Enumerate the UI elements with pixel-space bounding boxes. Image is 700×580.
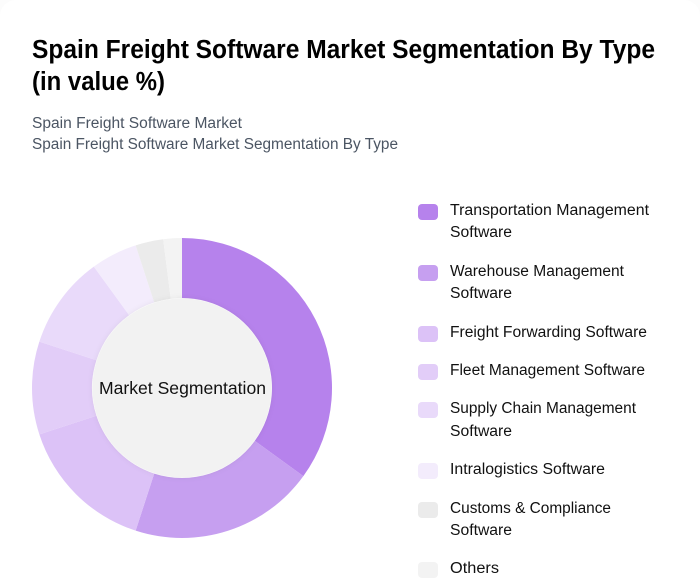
title: (in value %) <box>32 68 165 96</box>
legend item: Customs & Compliance Software <box>418 500 611 539</box>
title <box>32 36 655 96</box>
donut chart <box>32 238 332 538</box>
legend item: Warehouse Management Software <box>418 263 625 302</box>
legend item: Supply Chain Management Software <box>418 400 637 440</box>
legend <box>418 202 650 578</box>
subtitle: Spain Freight Software Market <box>32 115 243 132</box>
legend item: Supply Chain Management Software: Software <box>450 423 512 440</box>
center label: Market Segmentation <box>99 378 266 398</box>
legend item: Transportation Management Software: Transportation Management <box>450 202 650 219</box>
slice: Intralogistics Software <box>94 245 154 315</box>
legend item: Supply Chain Management Software: Supply Chain Management <box>450 400 637 417</box>
legend item: Customs & Compliance Software: Software <box>450 522 512 539</box>
subtitle: Spain Freight Software Market Segmentation By Type <box>32 136 398 153</box>
legend item: Others: Others <box>450 560 499 577</box>
slice: Freight Forwarding Software <box>39 416 154 531</box>
legend item: Others <box>418 560 499 578</box>
legend item: Warehouse Management Software: Warehouse Management <box>450 263 625 280</box>
slice: Supply Chain Management Software <box>39 267 129 360</box>
legend item: Intralogistics Software: Intralogistics Software <box>450 461 605 478</box>
slice: Warehouse Management Software <box>136 441 303 538</box>
legend item: Fleet Management Software: Fleet Management Software <box>450 362 645 379</box>
center circle <box>92 298 272 478</box>
slice: Others <box>163 238 182 299</box>
legend item: Freight Forwarding Software: Freight Forwarding Software <box>450 324 647 341</box>
legend item: Transportation Management Software: Software <box>450 224 512 241</box>
slice: Transportation Management Software <box>182 238 332 476</box>
legend item: Transportation Management Software <box>418 202 650 241</box>
subtitle <box>32 115 398 153</box>
legend item: Warehouse Management Software: Software <box>450 285 512 302</box>
slice: Fleet Management Software <box>32 342 96 434</box>
title: Spain Freight Software Market Segmentation By Type <box>32 36 655 64</box>
legend item: Customs & Compliance Software: Customs & Compliance <box>450 500 611 517</box>
slice: Customs & Compliance Software <box>136 239 171 302</box>
